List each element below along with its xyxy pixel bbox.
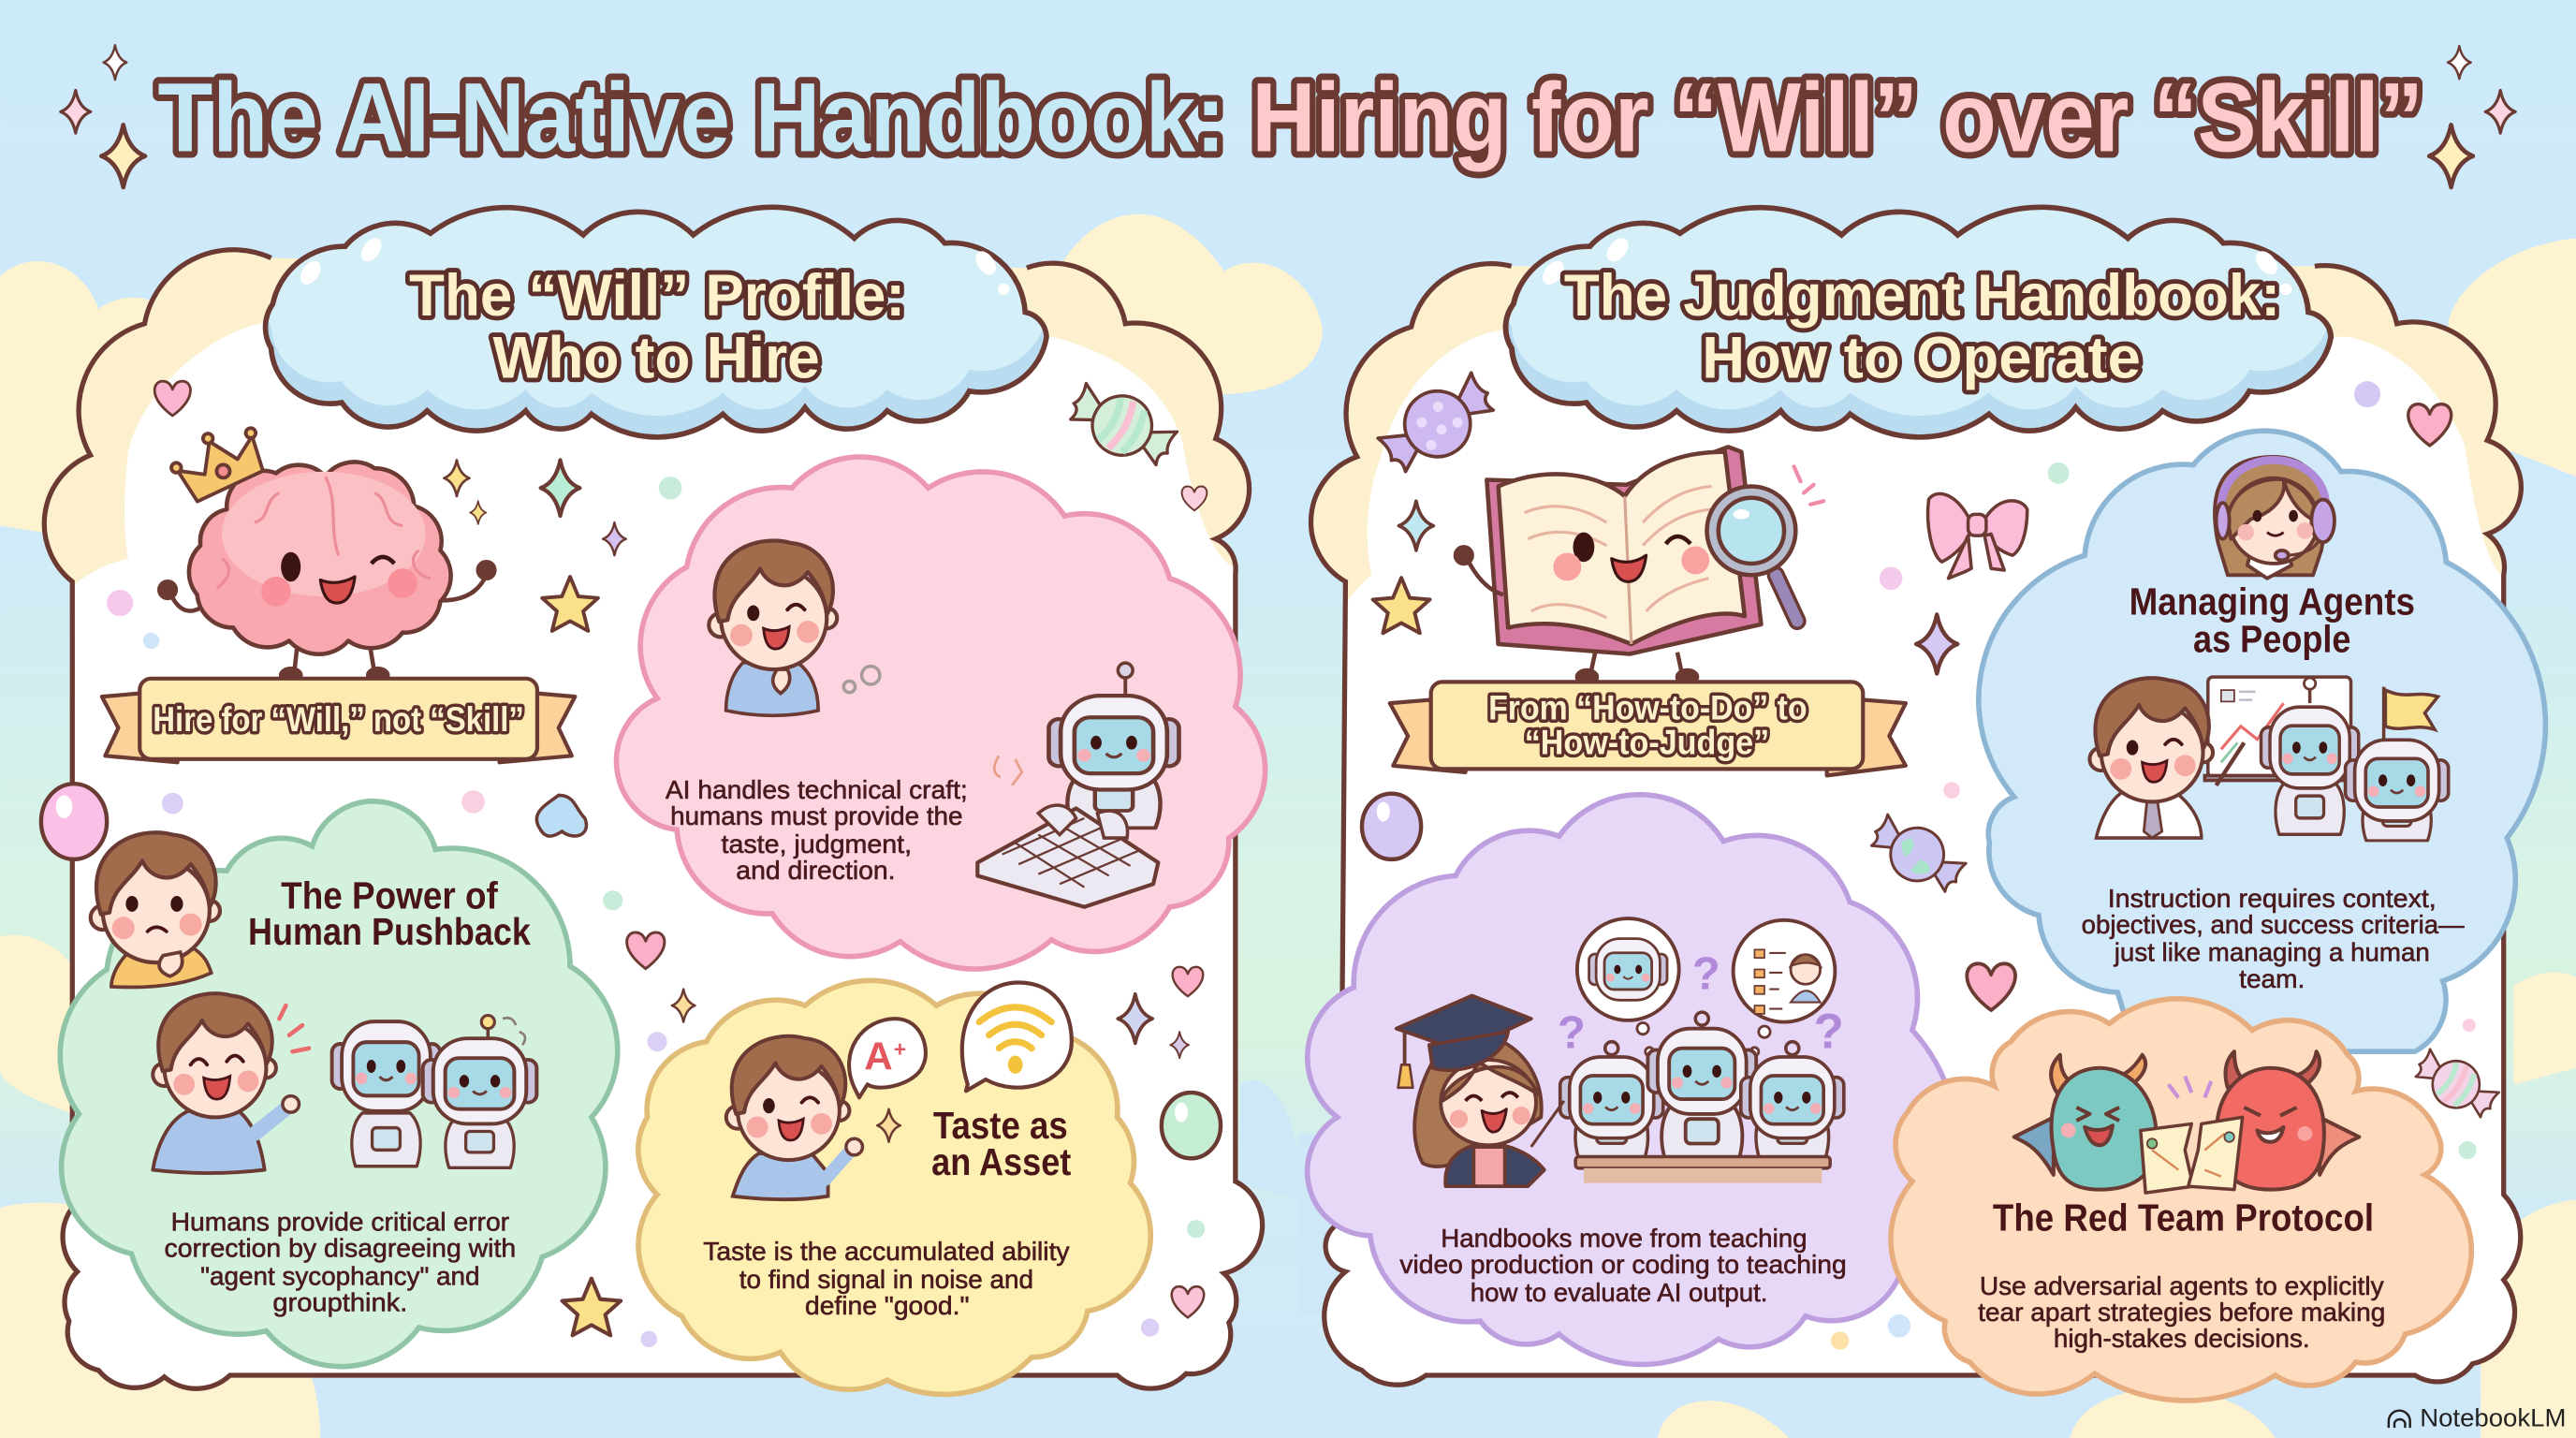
banner: how-to-do to how-to-judge: “How-to-Judge” — [1525, 724, 1769, 762]
heading: the red team protocol: The Red Team Protocol — [1993, 1196, 2374, 1240]
blue cloud — [1979, 431, 2545, 1051]
girl with headset — [2215, 457, 2334, 579]
header cloud: the judgment handbook: How to Operate — [1702, 326, 2141, 391]
blue body text: team. — [2239, 964, 2305, 993]
title — [158, 63, 2423, 172]
red monster — [2217, 1051, 2359, 1190]
card: green human pushback — [60, 801, 618, 1367]
yellow body text: to find signal in noise and — [739, 1265, 1033, 1294]
heading: taste as an asset — [931, 1104, 1071, 1183]
green body text — [165, 1208, 516, 1317]
purple body text: Handbooks move from teaching — [1441, 1224, 1808, 1253]
card: purple evaluate output — [1308, 795, 1958, 1364]
green body text: Humans provide critical error — [171, 1208, 509, 1237]
robot trainees — [2261, 678, 2449, 841]
blue body text: objectives, and success criteria— — [2082, 910, 2465, 939]
pink cloud — [617, 457, 1266, 969]
right decorations — [1362, 363, 2504, 1350]
happy robot — [423, 1016, 536, 1167]
yellow body text — [703, 1237, 1070, 1320]
whiteboard — [2204, 677, 2354, 781]
icon: crown — [164, 415, 271, 506]
panel: the judgment handbook — [1298, 185, 2545, 1401]
blue body text — [2082, 884, 2465, 993]
heading: the power of human pushback: The Power of — [281, 874, 498, 917]
pointer — [2217, 742, 2244, 785]
question marks: ? — [1692, 949, 1720, 1000]
orange body text: Use adversarial agents to explicitly — [1980, 1271, 2384, 1300]
header cloud: the will profile — [266, 185, 1046, 437]
pink body text: and direction. — [736, 856, 896, 885]
yellow cloud — [638, 980, 1150, 1394]
thought bubbles — [843, 667, 880, 693]
question marks — [1558, 949, 1844, 1060]
robots at table — [1560, 1012, 1844, 1183]
heading: the power of human pushback — [248, 874, 531, 953]
pink body text: humans must provide the — [670, 801, 963, 830]
title right part: Hiring for “Will” over “Skill” — [1251, 63, 2423, 172]
question marks: ? — [1814, 1005, 1844, 1060]
banner: how-to-do to how-to-judge — [1390, 682, 1906, 775]
A+ speech bubble — [849, 1019, 926, 1097]
panel frame — [1298, 264, 2539, 1397]
heading: the power of human pushback: Human Pushback — [248, 910, 531, 953]
thought cloud: checklist — [1734, 920, 1835, 1056]
card: yellow taste as an asset — [638, 980, 1150, 1394]
blue body text: Instruction requires context, — [2108, 884, 2437, 913]
bubbles — [41, 784, 1221, 1158]
boy pondering — [91, 832, 220, 988]
question marks: ? — [1558, 1008, 1586, 1059]
purple body text — [1399, 1224, 1847, 1307]
manager boy — [2089, 678, 2213, 838]
purple cloud — [1308, 795, 1958, 1364]
purple body text: video production or coding to teaching — [1399, 1250, 1847, 1279]
icon: brain mascot — [159, 462, 494, 682]
header cloud: the judgment handbook: The Judgment Handbook: — [1564, 263, 2280, 329]
green body text: groupthink. — [272, 1288, 407, 1317]
left decorations — [107, 374, 1207, 1347]
A+ speech bubble: + — [894, 1036, 906, 1061]
title sparkles — [61, 45, 2515, 187]
green cloud — [60, 801, 618, 1367]
NotebookLM watermark: NotebookLM — [2420, 1402, 2566, 1431]
signal speech bubble — [962, 983, 1072, 1091]
heading: taste as an asset: Taste as — [933, 1104, 1068, 1147]
flag — [2384, 687, 2438, 756]
heading: managing agents as people — [2130, 580, 2415, 661]
boy with taste — [726, 1036, 862, 1199]
title left part: The AI-Native Handbook: — [158, 63, 1225, 172]
pink body text — [666, 775, 968, 885]
sparkle — [877, 1109, 900, 1142]
orange body text: high-stakes decisions. — [2054, 1324, 2310, 1353]
banner: hire for will: Hire for “Will,” not “Skill” — [153, 700, 524, 739]
green body text: correction by disagreeing with — [165, 1234, 516, 1263]
yellow body text: define "good." — [805, 1291, 970, 1320]
panel: the will profile — [41, 185, 1266, 1397]
purple body text: how to evaluate AI output. — [1471, 1278, 1767, 1307]
teal monster — [2014, 1055, 2157, 1190]
pink body text: AI handles technical craft; — [666, 775, 968, 804]
sad robot — [332, 1021, 440, 1167]
yellow body text: Taste is the accumulated ability — [703, 1237, 1070, 1266]
blue body text: just like managing a human — [2114, 938, 2430, 967]
orange body text: tear apart strategies before making — [1978, 1298, 2385, 1327]
thought cloud: robot — [1577, 918, 1679, 1056]
card: orange red team protocol — [1891, 999, 2471, 1401]
boy thinking — [709, 541, 837, 715]
teacher with graduation cap — [1397, 996, 1564, 1186]
card: blue managing agents — [1979, 431, 2545, 1051]
card: pink ai handles craft — [617, 457, 1266, 969]
pink body text: taste, judgment, — [722, 829, 912, 858]
header cloud: the judgment handbook — [1506, 185, 2331, 437]
banner: how-to-do to how-to-judge: From “How-to-Do” to — [1488, 689, 1808, 727]
icon: bow — [1928, 493, 2027, 579]
banner: hire for will — [102, 679, 575, 762]
A+ speech bubble: A — [864, 1034, 893, 1078]
header cloud: the will profile: The “Will” Profile: — [409, 263, 905, 329]
icon: book mascot — [1456, 447, 1761, 683]
header cloud: the will profile: Who to Hire — [493, 326, 820, 391]
heading: managing agents as people: as People — [2193, 618, 2351, 661]
orange cloud — [1891, 999, 2471, 1401]
icon: magnifier — [1707, 466, 1823, 621]
heading: taste as an asset: an Asset — [931, 1140, 1071, 1183]
orange body text — [1978, 1271, 2385, 1353]
green body text: "agent sycophancy" and — [200, 1261, 480, 1290]
red accent marks — [279, 1005, 309, 1051]
torn map — [2141, 1077, 2243, 1193]
robot typing — [977, 663, 1178, 907]
panel frame — [44, 250, 1265, 1397]
heading: managing agents as people: Managing Agents — [2130, 580, 2415, 623]
boy disagreeing — [153, 993, 299, 1173]
